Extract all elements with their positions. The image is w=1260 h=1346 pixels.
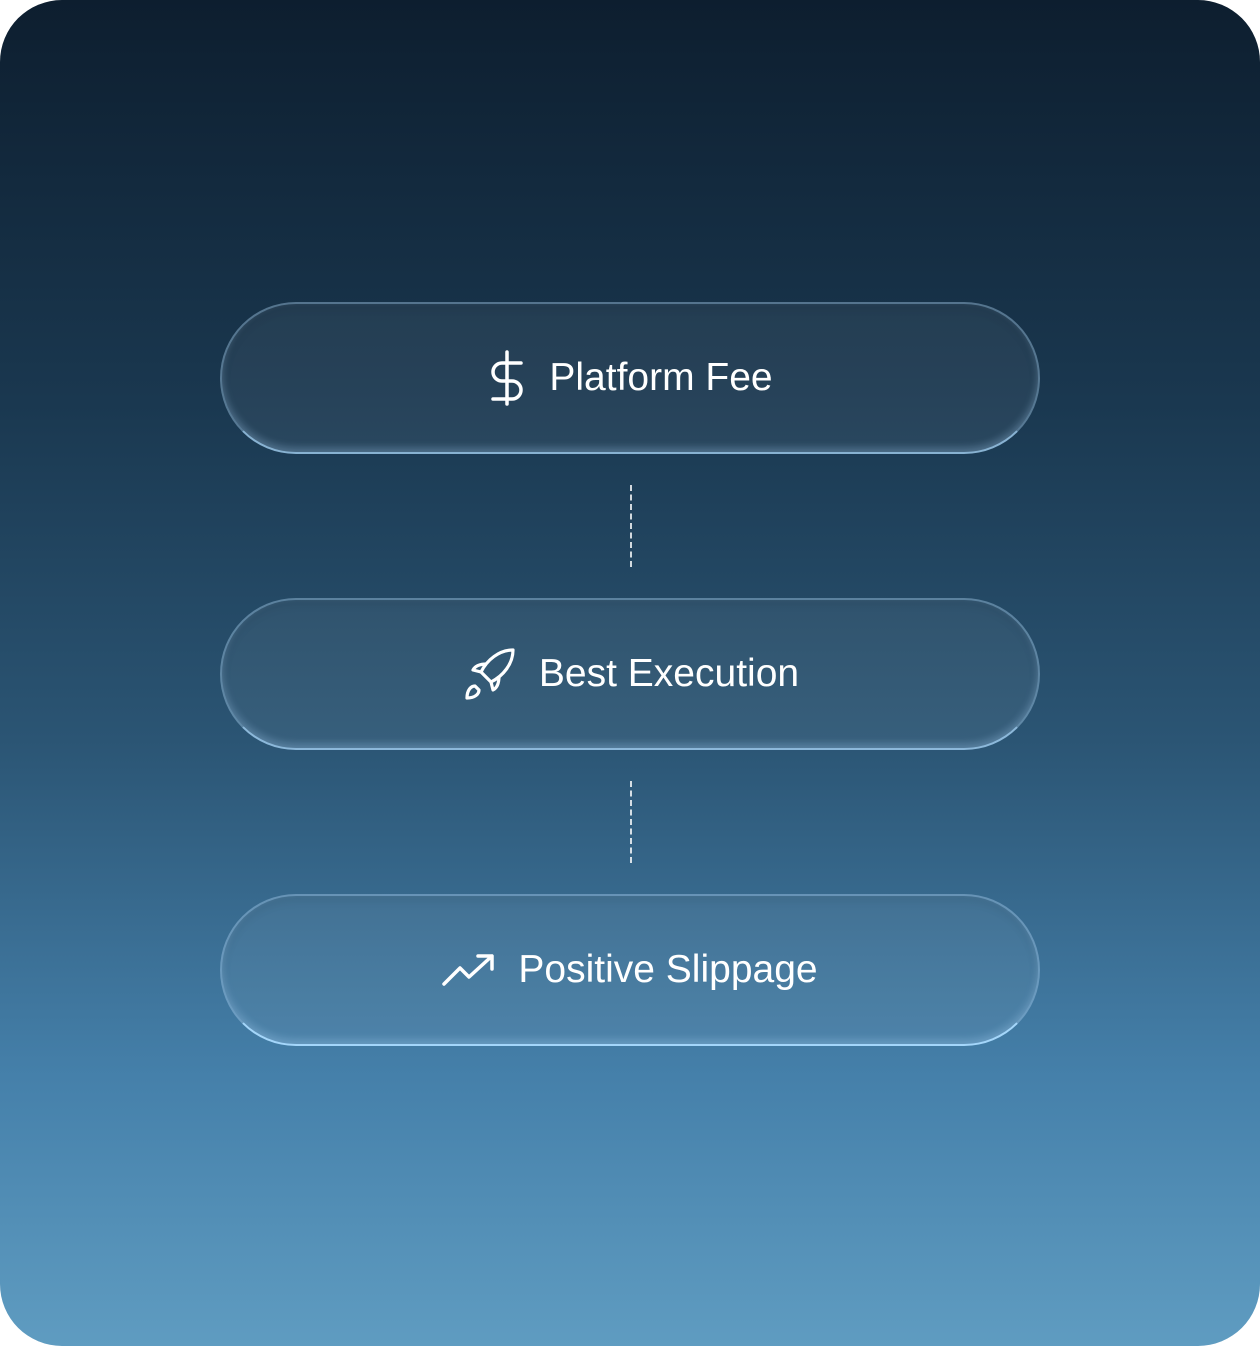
pill: platform fee bbox=[220, 302, 1040, 454]
icon: rocket bbox=[465, 648, 515, 700]
pill: positive slippage bbox=[220, 894, 1040, 1046]
icon: dollar bbox=[491, 350, 523, 406]
pill: best execution bbox=[220, 598, 1040, 750]
connector 2 bbox=[630, 781, 632, 863]
pill: positive slippage: Positive Slippage bbox=[518, 948, 818, 991]
icon: trend up bbox=[442, 954, 494, 986]
pill: platform fee: Platform Fee bbox=[549, 356, 773, 399]
pill: best execution: Best Execution bbox=[539, 652, 799, 695]
connector 1 bbox=[630, 485, 632, 567]
